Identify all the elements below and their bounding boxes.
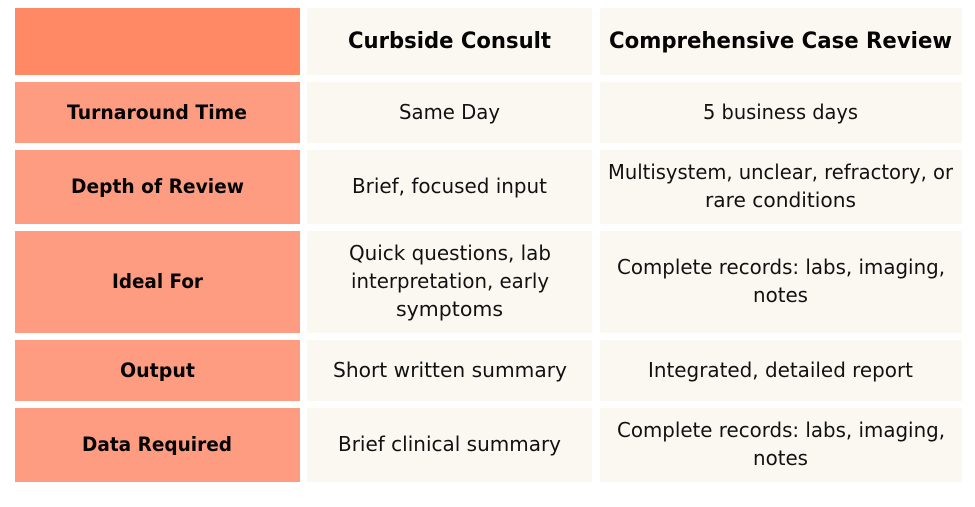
curbside: data required value bbox=[307, 408, 592, 482]
curbside: output value: Short written summary bbox=[333, 358, 567, 382]
curbside: ideal for value: Quick questions, lab bbox=[349, 241, 551, 265]
header: empty corner cell bbox=[15, 8, 300, 75]
comprehensive: ideal for value: notes bbox=[753, 283, 808, 307]
comprehensive: ideal for value: Complete records: labs, imaging, bbox=[617, 255, 945, 279]
curbside: output value bbox=[307, 340, 592, 401]
row label: Ideal For: Ideal For bbox=[112, 270, 203, 293]
curbside: depth value: Brief, focused input bbox=[352, 174, 547, 198]
curbside: ideal for value bbox=[307, 231, 592, 333]
comprehensive: depth value: Multisystem, unclear, refractory, or bbox=[608, 160, 954, 184]
curbside: turnaround value: Same Day bbox=[399, 100, 500, 124]
row label: Output bbox=[15, 340, 300, 401]
row label: Turnaround Time: Turnaround Time bbox=[67, 101, 247, 124]
row label: Turnaround Time bbox=[15, 82, 300, 143]
header: Comprehensive Case Review: Comprehensive Case Review bbox=[609, 28, 952, 54]
comprehensive: data required value: Complete records: labs, imaging, bbox=[617, 418, 945, 442]
comprehensive: depth value bbox=[600, 150, 962, 224]
row label: Ideal For bbox=[15, 231, 300, 333]
comprehensive: ideal for value bbox=[600, 231, 962, 333]
row label: Output: Output bbox=[120, 359, 195, 382]
curbside: ideal for value: interpretation, early bbox=[351, 269, 549, 293]
row label: Data Required: Data Required bbox=[82, 433, 232, 456]
row label: Data Required bbox=[15, 408, 300, 482]
comprehensive: depth value: rare conditions bbox=[705, 188, 856, 212]
row label: Depth of Review: Depth of Review bbox=[71, 175, 244, 198]
curbside: data required value: Brief clinical summary bbox=[338, 432, 561, 456]
comprehensive: turnaround value bbox=[600, 82, 962, 143]
header: Comprehensive Case Review bbox=[600, 8, 962, 75]
comprehensive: data required value: notes bbox=[753, 446, 808, 470]
curbside: turnaround value bbox=[307, 82, 592, 143]
curbside: ideal for value: symptoms bbox=[396, 297, 503, 321]
curbside: depth value bbox=[307, 150, 592, 224]
comprehensive: output value: Integrated, detailed report bbox=[648, 358, 913, 382]
comprehensive: turnaround value: 5 business days bbox=[703, 100, 858, 124]
comprehensive: data required value bbox=[600, 408, 962, 482]
comprehensive: output value bbox=[600, 340, 962, 401]
header: Curbside Consult bbox=[307, 8, 592, 75]
header: Curbside Consult: Curbside Consult bbox=[348, 28, 551, 54]
row label: Depth of Review bbox=[15, 150, 300, 224]
